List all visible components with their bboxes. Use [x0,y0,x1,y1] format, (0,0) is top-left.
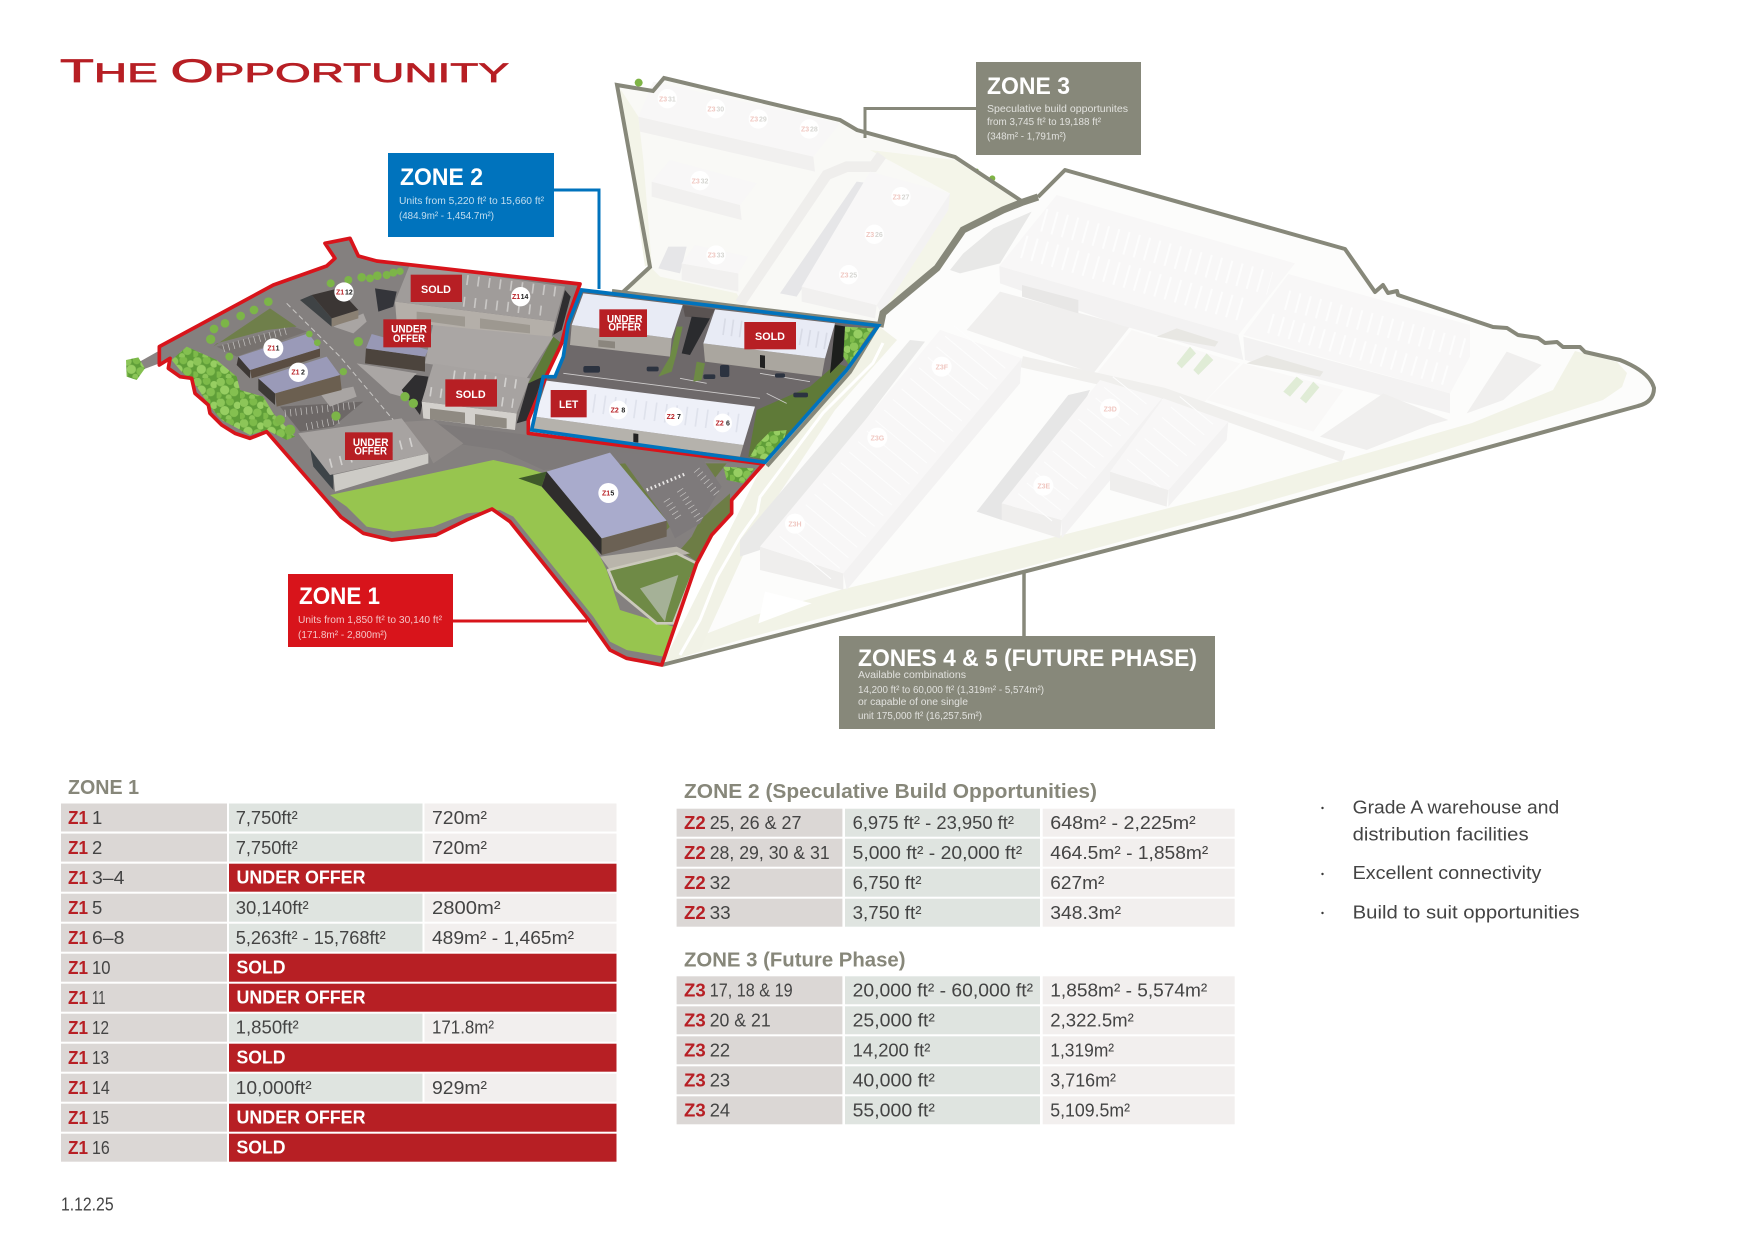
row Z2 28 to 31 [677,839,1235,867]
row Z3 24: 24 [710,1100,730,1121]
shaded tree strip [740,340,925,557]
row Z1 2: 720m² [432,837,487,858]
trees south east [750,430,787,459]
status tag sold lower: SOLD [456,389,486,401]
table zone 2 [677,809,1235,927]
callout zones 4 and 5: Available combinations [858,670,966,681]
callout zone 3: ZONE 3 [987,73,1070,100]
table zone 1 [61,804,616,1162]
marker Z2 7: 7 [677,414,681,421]
marker Z1 5 [598,483,618,503]
pond [640,575,678,622]
row Z1 1: Z1 [68,807,88,828]
date: 1.12.25 [61,1194,114,1215]
callout zones 4 and 5: ZONES 4 & 5 (FUTURE PHASE) [858,645,1197,672]
row Z2 33: 33 [710,902,731,923]
row Z1 5: 5 [92,897,102,918]
row Z1 12: 1,850ft² [236,1017,299,1038]
marker Z1 14: 14 [521,294,529,301]
grey band east of zone 2 [767,322,880,466]
ghost circles: 33 [717,253,725,260]
callout zone 2: Units from 5,220 ft² to 15,660 ft² [399,196,545,207]
grey boundary zone 3 south [612,291,880,324]
row Z3 22 [677,1036,1235,1064]
marker Z1 12: Z1 [336,289,344,296]
row Z3 22: 1,319m² [1050,1040,1114,1061]
ghost circles: Z3 [659,96,667,103]
parking lines [563,373,810,403]
building Z3D E [1002,380,1163,538]
building Z3F G H [760,330,1022,590]
row Z3 23: 40,000 ft² [853,1070,935,1091]
callout zone 3: Speculative build opportunites [987,104,1128,115]
lorries and canopies [1157,328,1323,403]
grey boundary zones 4 and 5 [662,170,1654,665]
marker Z2 6: Z2 [716,420,724,427]
sold building top [395,264,565,337]
service yard between buildings [683,305,715,318]
callout zone 3 [865,62,1141,155]
ghost circles: Z3 [840,272,849,279]
marker Z1 5: Z1 [602,490,610,497]
row Z2 33 [677,899,1235,927]
row Z1 10: Z1 [68,957,88,978]
plaza [600,547,690,570]
marker Z1 2: Z1 [291,370,300,377]
row Z1 14: 929m² [432,1077,487,1098]
callout zones 4 and 5 [839,573,1215,729]
zone 2 site [532,290,878,555]
row Z3 24: 55,000 ft² [853,1100,935,1121]
callout zone 1: Units from 1,850 ft² to 30,140 ft² [298,615,443,626]
west verge [662,327,897,665]
shaded strip [950,212,1032,273]
row Z3 17, 18 and 19: 17, 18 & 19 [710,980,793,1001]
road strip [977,390,1090,520]
row Z1 5: 2800m² [432,897,501,918]
under offer building lower [298,418,428,492]
ghost circles: Z3 [707,106,716,113]
row Z2 32: Z2 [684,872,706,893]
row Z3 17, 18 and 19: Z3 [684,980,706,1001]
west verge [620,88,652,267]
row Z2 33: Z2 [684,902,706,923]
building Z3 25-27 [802,172,950,318]
Z1 2 building [258,357,342,407]
row Z1 3-4: 3–4 [92,867,124,888]
row Z2 25, 26 and 27: 648m² - 2,225m² [1050,812,1196,833]
marker Z1 14 [511,287,530,306]
row Z2 32: 6,750 ft² [853,872,922,893]
building Z3 28-31 [638,82,840,172]
row Z2 32 [677,869,1235,897]
row Z1 6-8: 6–8 [92,927,124,948]
status tag let [551,390,587,417]
ghost circles: Z3 [801,127,809,134]
ghost circles: 30 [716,106,724,113]
row Z1 12: 171.8m² [432,1017,494,1038]
row Z1 10: 10 [92,957,110,978]
row Z3 24: Z3 [684,1100,706,1121]
row Z2 25, 26 and 27: 6,975 ft² - 23,950 ft² [853,812,1014,833]
dark gap [402,375,428,415]
building Z3 right [1110,398,1228,507]
row Z3 22: 14,200 ft² [853,1040,930,1061]
road [740,155,882,303]
building Z3 33 [658,245,748,292]
marker Z2 7 [665,407,683,426]
pond ghost [758,592,812,623]
row Z2 28 to 31: 464.5m² - 1,858m² [1050,842,1208,863]
ghost circles: Z3 [708,253,716,260]
row Z1 2: 2 [92,837,102,858]
status tag under offer middle: UNDER [391,324,427,336]
row Z2 25, 26 and 27: 25, 26 & 27 [710,812,802,833]
row Z2 28 to 31: 5,000 ft² - 20,000 ft² [853,842,1022,863]
ghost circles: Z3 [866,232,874,239]
status tag sold [744,322,796,349]
ghost circles: 31 [668,96,676,103]
marker Z2 6 [713,414,732,432]
ghost circles [658,89,911,284]
heading zone 2 table: ZONE 2 (Speculative Build Opportunities) [684,780,1097,803]
row Z1 6-8: Z1 [68,927,88,948]
trees by east corner [723,467,755,483]
ghost circles: Z3H [788,521,802,528]
heading zone 1 table: ZONE 1 [68,776,139,799]
row Z1 2: 7,750ft² [236,837,298,858]
under offer small building [365,334,428,372]
row Z3 20 and 21: 20 & 21 [710,1010,771,1031]
status tag under offer bottom: OFFER [354,445,387,457]
row Z1 1 [61,804,616,832]
west tree [126,357,145,380]
row Z1 14 [61,1074,616,1102]
callout zones 4 and 5: 14,200 ft² to 60,000 ft² (1,319m² - 5,574m²) [858,685,1044,696]
row Z3 20 and 21 [677,1006,1235,1034]
warehouse two [1243,274,1470,413]
ghost circles: Z3G [871,435,884,442]
row Z1 11: 11 [92,987,106,1008]
tree clump [172,347,295,440]
concrete yard [425,323,553,378]
status tag sold lower [445,379,497,407]
row Z1 14: 10,000ft² [236,1077,312,1098]
row Z1 1: 720m² [432,807,487,828]
row Z1 3-4: UNDER OFFER [236,867,366,888]
row Z1 14: 14 [92,1077,110,1098]
row Z3 20 and 21: 2,322.5m² [1050,1010,1134,1031]
lawn main [330,460,673,657]
row Z1 5: Z1 [68,897,88,918]
yards [1097,330,1240,403]
callout zone 3: from 3,745 ft² to 19,188 ft² [987,117,1102,128]
marker Z1 2 [289,363,308,382]
callout zone 1 [288,574,587,647]
row Z1 16: Z1 [68,1137,88,1158]
west spur road [137,351,159,370]
marker Z2 8 [609,401,628,419]
row Z3 22: 22 [710,1040,730,1061]
ghost circles: Z3E [1037,483,1050,490]
row Z1 12 [61,1014,616,1042]
parking lots [217,327,307,357]
ghost circles: 26 [875,232,883,239]
ghost circles: Z3F [936,364,949,371]
green south east [748,363,847,460]
row Z2 28 to 31: 28, 29, 30 & 31 [710,842,830,863]
zone 1 site [126,238,763,665]
row Z3 17, 18 and 19 [677,976,1235,1004]
building Z1 15 [542,453,667,555]
trees north east [843,327,873,367]
access road [1022,362,1343,457]
callout zone 2: (484.9m² - 1,454.7m²) [399,211,494,222]
pond surround [608,553,697,623]
zone 2 ground [532,290,878,462]
row Z1 15: 15 [92,1107,109,1128]
row Z1 1: 7,750ft² [236,807,298,828]
row Z2 25, 26 and 27 [677,809,1235,837]
row Z1 2 [61,834,616,862]
marker Z1 5: 5 [610,490,614,497]
row Z1 13: 13 [92,1047,109,1068]
status tag sold top: SOLD [421,284,451,296]
east car parks [1320,393,1448,450]
row Z3 24 [677,1096,1235,1124]
ghost circles: 32 [701,178,709,185]
callout zone 3: (348m² - 1,791m²) [987,132,1066,142]
warehouse one [999,195,1295,360]
table zone 3 [677,976,1235,1124]
heading zone 3 table: ZONE 3 (Future Phase) [684,949,906,972]
row Z3 17, 18 and 19: 1,858m² - 5,574m² [1050,980,1207,1001]
marker Z1 14: Z1 [512,294,520,301]
grey boundary zone 3 [880,197,1038,327]
row Z2 28 to 31: Z2 [684,842,706,863]
status tag under offer bottom [345,432,393,460]
car park Z15 [617,452,722,538]
row Z1 11 [61,984,616,1012]
east verge [870,150,1018,312]
row Z3 22: Z3 [684,1040,706,1061]
row Z2 33: 3,750 ft² [853,902,922,923]
callout zones 4 and 5: or capable of one single [858,697,968,708]
site map [126,78,1654,665]
marker Z1 12 [334,282,354,302]
lawn top left [213,308,297,347]
shadow of Z15 on lawn [518,472,547,487]
status tag let: LET [559,399,578,411]
road between zone 2 and Z15 [420,423,763,470]
row Z1 5 [61,894,616,922]
row Z3 23: 3,716m² [1050,1070,1116,1091]
row Z1 15 [61,1104,616,1132]
row Z1 11: Z1 [68,987,88,1008]
status tag under offer middle [383,319,431,347]
marker Z1 12: 12 [345,289,353,296]
row Z3 23: 23 [710,1070,730,1091]
ghost circles: Z3 [750,117,758,124]
row Z1 13 [61,1044,616,1072]
marker Z2 7: Z2 [667,414,675,421]
ghost circles: Z3D [1104,406,1117,413]
pavement central [357,363,417,397]
row Z1 1: 1 [92,807,102,828]
row Z1 13: SOLD [236,1047,286,1068]
ghost circles: 28 [810,127,818,134]
status tag under offer [599,309,647,337]
sold building [703,309,835,377]
row Z3 20 and 21: Z3 [684,1010,706,1031]
callout zone 2 [388,153,599,289]
road centre line [287,303,393,420]
row Z1 5: 30,140ft² [236,897,309,918]
Z1 12 building [300,288,358,327]
under offer building [570,293,683,357]
status tag under offer: OFFER [608,322,641,334]
ghost circles: 29 [759,117,767,124]
ghost circles: Z3 [893,194,901,201]
ghost circles: 27 [902,194,910,201]
row Z1 3-4: Z1 [68,867,88,888]
building Z3 32 [652,160,757,220]
marker Z1 1 [263,338,283,358]
cars [583,365,808,397]
grey boundary zone 3 north [617,78,1023,292]
marker Z2 6: 6 [726,420,730,427]
row Z1 6-8: 5,263ft² - 15,768ft² [236,927,386,948]
row Z1 15: UNDER OFFER [236,1107,366,1128]
status tag under offer bottom: UNDER [353,437,388,449]
white track [680,343,883,655]
dark access road [682,317,710,355]
row Z1 11: UNDER OFFER [236,987,366,1008]
row Z1 12: Z1 [68,1017,88,1038]
callout zone 1: (171.8m² - 2,800m²) [298,630,387,641]
row Z3 23: Z3 [684,1070,706,1091]
row Z2 32: 627m² [1050,872,1104,893]
south verge [672,351,1627,660]
east of yard dark strips [553,290,571,335]
row Z1 16 [61,1134,616,1162]
row Z3 17, 18 and 19: 20,000 ft² - 60,000 ft² [853,980,1033,1001]
planting strips [658,327,683,377]
row Z1 10 [61,954,616,982]
bullet list [1321,796,1580,922]
row Z1 16: SOLD [236,1137,286,1158]
status tag under offer middle: OFFER [393,333,425,345]
zone 1 ground [159,238,763,665]
ghost circles: Z3 [692,178,700,185]
row Z2 33: 348.3m² [1050,902,1121,923]
row Z3 24: 5,109.5m² [1050,1100,1130,1121]
ghost circles: 25 [849,272,857,279]
row Z1 10: SOLD [236,957,286,978]
row Z2 25, 26 and 27: Z2 [684,812,706,833]
marker Z2 8: 8 [621,407,625,414]
title: T HE O PPORTUNITY [60,53,510,89]
callout zone 2: ZONE 2 [400,164,483,191]
Z1 1 building [237,333,320,378]
row Z1 15: Z1 [68,1107,88,1128]
marker Z1 1: Z1 [267,346,276,353]
marker Z2 8: Z2 [611,407,619,414]
callout zone 1: ZONE 1 [299,583,380,610]
row Z1 16: 16 [92,1137,110,1158]
bullet list: distribution facilities [1353,823,1529,844]
marker Z1 1: 1 [276,346,280,353]
row Z1 14: Z1 [68,1077,88,1098]
bullet list: Excellent connectivity [1353,862,1542,883]
row Z3 23 [677,1066,1235,1094]
let building [533,381,755,457]
row Z1 2: Z1 [68,837,88,858]
zone 3 ghosted area [617,78,1023,327]
zone 1 red outline [159,238,763,665]
status tag sold top [411,275,462,302]
callout zones 4 and 5: unit 175,000 ft² (16,257.5m²) [858,711,982,722]
row Z1 13: Z1 [68,1047,88,1068]
car park west [967,292,1130,373]
bullet list: Build to suit opportunities [1353,901,1580,922]
marker Z1 2: 2 [301,370,305,377]
bullet list: Grade A warehouse and [1353,796,1559,817]
dark strip [780,182,870,297]
row Z3 20 and 21: 25,000 ft² [853,1010,935,1031]
east dark green [680,493,730,562]
zones 4 and 5 ghosted area [662,170,1653,665]
row Z1 6-8: 489m² - 1,465m² [432,927,574,948]
ghost circles [785,357,1120,534]
status tag sold: SOLD [755,331,785,343]
zone 2 blue outline [532,290,878,462]
row Z1 6-8 [61,924,616,952]
row Z1 3-4 [61,864,616,892]
tree tops behind boundary [635,79,995,181]
roadside trees [206,268,418,435]
south verge [623,267,743,305]
status tag under offer: UNDER [607,313,642,325]
sold building lower [422,363,530,430]
row Z2 32: 32 [710,872,731,893]
row Z1 12: 12 [92,1017,109,1038]
